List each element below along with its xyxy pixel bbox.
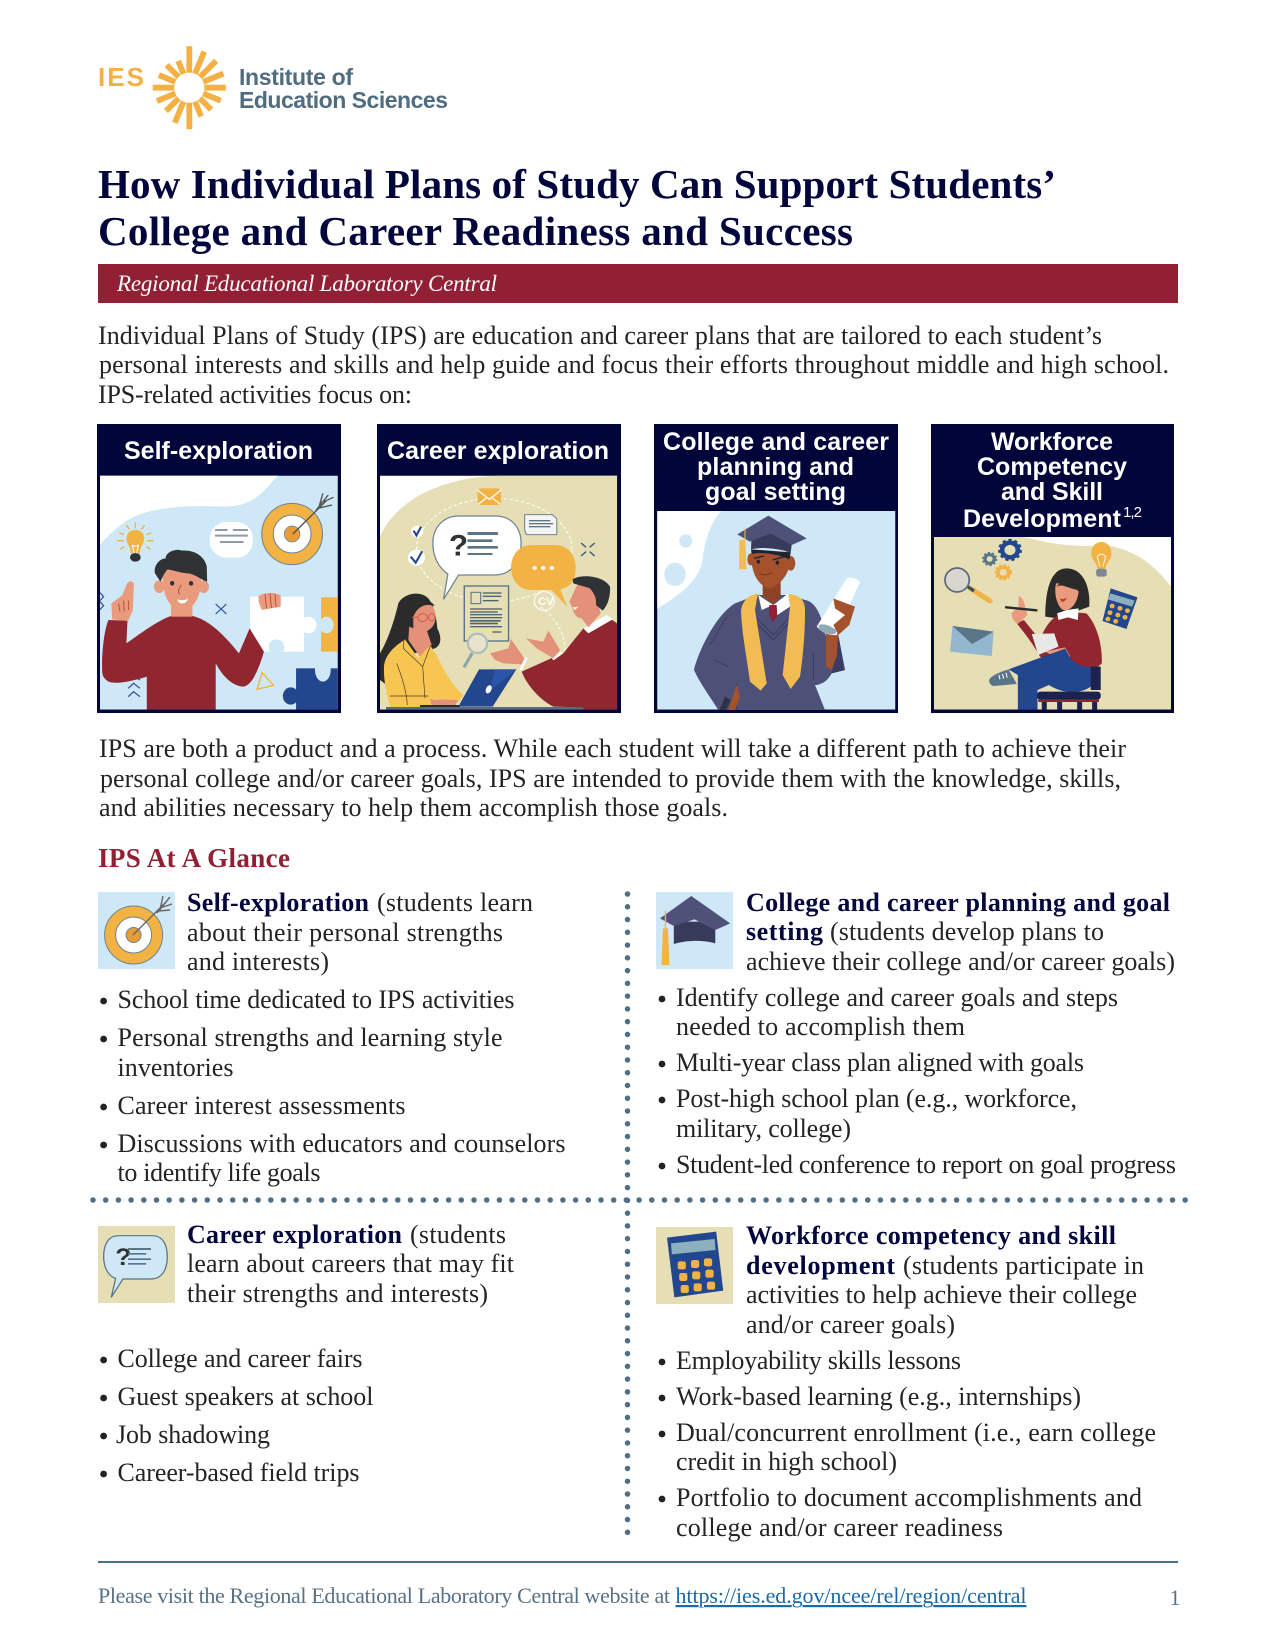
intro text: and/or career goals) <box>746 1310 955 1339</box>
panel heading: and Skill <box>1001 478 1103 506</box>
illustration: background <box>657 511 895 710</box>
bullet list: Personal strengths and learning style <box>118 1023 502 1052</box>
panel: Self-exploration <box>97 424 341 713</box>
bullet list <box>100 985 565 1187</box>
logo wordmark: Institute of Education Sciences: Education Sciences <box>239 87 448 113</box>
icon: calculator <box>656 1227 733 1304</box>
intro paragraph: Individual Plans of Study (IPS) are education and career plans that are tailored to each student’s <box>98 321 1102 350</box>
icon: graduation cap <box>656 892 733 969</box>
man <box>490 576 617 710</box>
panel heading: Self-exploration <box>124 437 313 465</box>
panel heading <box>663 428 889 506</box>
icon: target with arrow <box>98 892 175 969</box>
footer: Please visit the Regional Educational Laboratory Central website at <box>98 1583 670 1608</box>
cell: College and career planning and goal setting <box>656 888 1176 1179</box>
intro paragraph <box>98 321 1169 409</box>
illustration: student writing with tools <box>934 537 1171 710</box>
panel: College and career planning and goal setting <box>654 424 898 713</box>
footer: https://ies.ed.gov/ncee/rel/region/central <box>676 1583 1026 1608</box>
bullet list: to identify life goals <box>118 1158 320 1187</box>
logo wordmark: Institute of Education Sciences <box>239 64 448 113</box>
intro text: development <box>746 1251 895 1280</box>
intro text: (students develop plans to <box>830 917 1104 946</box>
intro text: about their personal strengths <box>187 918 503 947</box>
bullet list: Portfolio to document accomplishments and <box>676 1483 1142 1512</box>
panel heading: 1,2 <box>1123 504 1142 521</box>
title: How Individual Plans of Study Can Support Students’ <box>98 161 1056 207</box>
illustration: student and counselor at laptop <box>380 576 617 710</box>
intro text <box>746 1221 1144 1339</box>
bullet list: Identify college and career goals and steps <box>676 983 1118 1012</box>
intro text: activities to help achieve their college <box>746 1280 1137 1309</box>
intro text: College and career planning and goal <box>746 888 1170 917</box>
icon: sun <box>153 46 226 129</box>
bullet list: military, college) <box>676 1114 851 1143</box>
cell: Workforce competency and skill development <box>656 1221 1156 1542</box>
intro text: (students learn <box>377 888 533 917</box>
bullet list: credit in high school) <box>676 1447 897 1476</box>
intro text: achieve their college and/or career goals) <box>746 947 1175 976</box>
panel heading: Development <box>963 505 1122 533</box>
bullet list: School time dedicated to IPS activities <box>118 985 514 1014</box>
logo wordmark: IES: IES <box>98 62 144 92</box>
panel: Workforce Competency and Skill Development <box>931 424 1174 713</box>
intro text: (students participate in <box>903 1251 1144 1280</box>
panel heading: planning and <box>697 453 854 481</box>
intro text: setting <box>746 917 823 946</box>
intro text: learn about careers that may fit <box>187 1249 515 1278</box>
banner: Regional Educational Laboratory Central <box>98 264 1178 303</box>
outro paragraph: personal college and/or career goals, IPS are intended to provide them with the knowledge, skills, <box>100 764 1121 793</box>
intro text: Career exploration <box>187 1220 403 1249</box>
footer <box>98 1561 1180 1610</box>
bullet list: College and career fairs <box>118 1344 362 1373</box>
icon: speech bubble <box>98 1226 175 1303</box>
outro paragraph: and abilities necessary to help them accomplish those goals. <box>99 793 728 822</box>
panel: Career exploration <box>377 424 621 713</box>
bullet list: Post-high school plan (e.g., workforce, <box>676 1084 1077 1113</box>
logo: Institute of Education Sciences <box>98 46 448 129</box>
bullet list: Dual/concurrent enrollment (i.e., earn college <box>676 1418 1156 1447</box>
illustration: graduate with diploma <box>694 516 860 710</box>
bullet list: Guest speakers at school <box>118 1382 374 1411</box>
section heading: IPS At A Glance: IPS At A Glance <box>98 843 290 873</box>
panel heading: Workforce <box>991 428 1113 456</box>
bullet list: Multi-year class plan aligned with goals <box>676 1048 1084 1077</box>
banner: Regional Educational Laboratory Central: Regional Educational Laboratory Central <box>116 271 497 296</box>
illustration: speech bubbles and resume: CV <box>538 596 554 608</box>
panel heading: goal setting <box>705 478 846 506</box>
intro text: and interests) <box>187 947 329 976</box>
bullet list: Student-led conference to report on goal progress <box>676 1150 1176 1179</box>
bullet list: Work-based learning (e.g., internships) <box>676 1382 1081 1411</box>
woman <box>380 594 463 707</box>
cell: Self-exploration <box>98 888 566 1187</box>
intro text <box>187 1220 515 1308</box>
cell: Career exploration <box>98 1220 515 1487</box>
illustration: student with puzzle piece <box>100 476 338 710</box>
illustration: speech bubbles and resume: ? <box>449 530 468 562</box>
outro paragraph <box>99 734 1126 822</box>
bullet list: Job shadowing <box>116 1420 270 1449</box>
bullet list <box>659 983 1176 1179</box>
bullet list: college and/or career readiness <box>676 1513 1003 1542</box>
panel heading: College and career <box>663 428 889 456</box>
panel heading: Career exploration <box>387 437 609 465</box>
intro paragraph: IPS-related activities focus on: <box>98 380 412 409</box>
panel heading: Competency <box>977 453 1127 481</box>
laptop and table <box>386 669 584 710</box>
bullet list: needed to accomplish them <box>676 1012 965 1041</box>
bullet list: Employability skills lessons <box>676 1346 961 1375</box>
bullet list: Career interest assessments <box>118 1091 406 1120</box>
title <box>98 161 1056 254</box>
intro text: Workforce competency and skill <box>746 1221 1116 1250</box>
icon: speech bubble: ? <box>115 1244 131 1271</box>
intro text <box>746 888 1175 976</box>
bullet list: Career-based field trips <box>118 1458 360 1487</box>
intro text: (students <box>410 1220 506 1249</box>
outro paragraph: IPS are both a product and a process. While each student will take a different path to achieve their <box>99 734 1126 763</box>
illustration: speech bubbles and resume <box>380 476 617 710</box>
bullet list: inventories <box>118 1053 234 1082</box>
panel heading <box>963 428 1142 533</box>
bullet list <box>100 1344 373 1487</box>
logo wordmark: Institute of Education Sciences: Institute of <box>239 64 353 90</box>
intro paragraph: personal interests and skills and help guide and focus their efforts throughout middle and high school. <box>99 350 1169 379</box>
title: College and Career Readiness and Success <box>98 208 853 254</box>
intro text <box>187 888 533 976</box>
footer: 1 <box>1170 1585 1180 1610</box>
intro text: their strengths and interests) <box>187 1279 488 1308</box>
bullet list: Discussions with educators and counselors <box>118 1129 566 1158</box>
intro text: Self-exploration <box>187 888 370 917</box>
bullet list <box>659 1346 1156 1542</box>
